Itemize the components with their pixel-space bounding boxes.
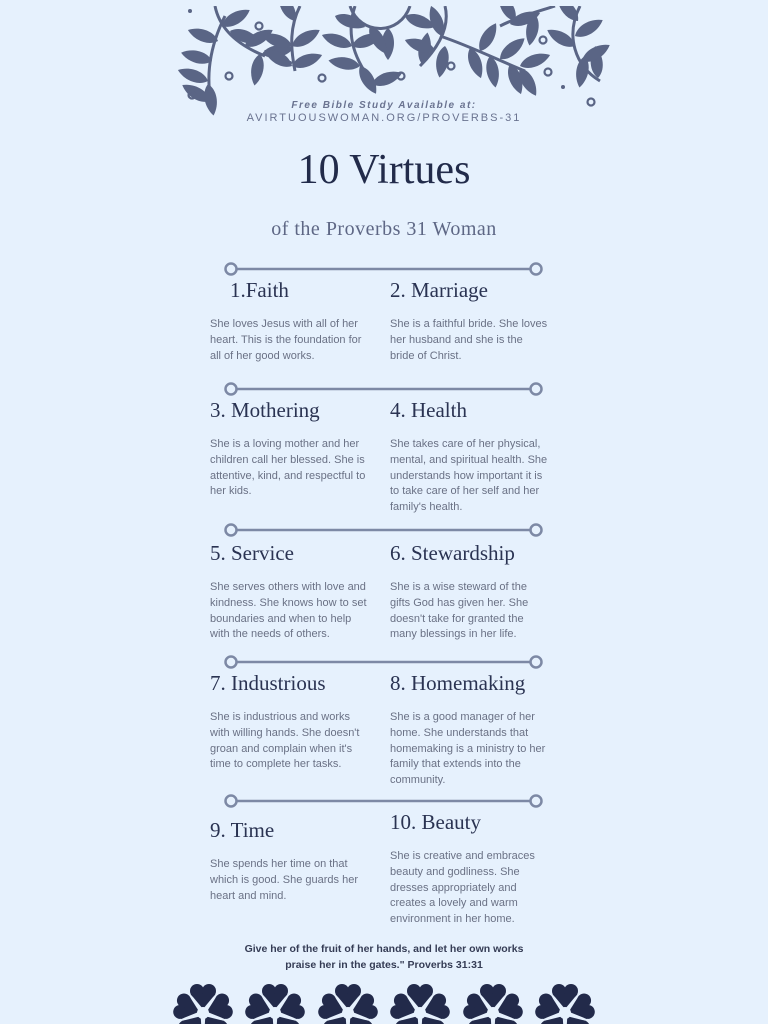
virtue 6: 6. Stewardship — [390, 541, 515, 565]
virtue 1: She loves Jesus with all of her heart. This is the foundation for all of her good works. — [210, 318, 361, 362]
virtue 8 — [390, 671, 546, 786]
virtue 5: She serves others with love and kindness. She knows how to set boundaries and when to help with the needs of others. — [210, 581, 367, 640]
quote — [245, 943, 523, 971]
decoration: top leaves — [178, 6, 610, 116]
virtue 10 — [390, 810, 535, 925]
virtue 5: 5. Service — [210, 541, 294, 565]
virtue 4: 4. Health — [390, 398, 467, 422]
virtue 4: She takes care of her physical, mental, and spiritual health. She understands how important it is to take care of her self and her family's health. — [390, 438, 547, 513]
virtue 5 — [210, 541, 367, 640]
subtitle: of the Proverbs 31 Woman — [271, 218, 497, 240]
virtue 9 — [210, 818, 358, 902]
decoration: bottom flowers — [173, 984, 595, 1024]
virtue 8: She is a good manager of her home. She understands that homemaking is a ministry to her family that extends into the community. — [390, 711, 545, 786]
virtue 10: She is creative and embraces beauty and godliness. She dresses appropriately and creates a lovely and warm environment in her home. — [390, 850, 535, 925]
virtue 6: She is a wise steward of the gifts God has given her. She doesn't take for granted the many blessings in her life. — [390, 581, 528, 640]
virtue 2: She is a faithful bride. She loves her husband and she is the bride of Christ. — [390, 318, 547, 362]
text: bible study link: AVIRTUOUSWOMAN.ORG/PROVERBS-31 — [247, 112, 521, 124]
virtue 3: She is a loving mother and her children call her blessed. She is attentive, kind, and respectful to her kids. — [210, 438, 365, 497]
virtue 1 — [210, 278, 362, 362]
text: bible study link — [246, 100, 521, 124]
text: bible study link: Free Bible Study Available at: — [291, 100, 477, 111]
virtue 9: 9. Time — [210, 818, 274, 842]
quote: praise her in the gates." Proverbs 31:31 — [285, 959, 483, 971]
virtue 2 — [390, 278, 547, 362]
quote: Give her of the fruit of her hands, and let her own works — [245, 943, 523, 955]
virtue 6 — [390, 541, 528, 640]
title: 10 Virtues — [298, 147, 470, 193]
virtue 7: 7. Industrious — [210, 671, 326, 695]
virtue 3: 3. Mothering — [210, 398, 320, 422]
virtue 9: She spends her time on that which is good. She guards her heart and mind. — [210, 858, 358, 902]
virtue 7: She is industrious and works with willing hands. She doesn't groan and complain when it's time to complete her tasks. — [210, 711, 359, 770]
virtue 4 — [390, 398, 547, 513]
virtue 2: 2. Marriage — [390, 278, 488, 302]
virtue 3 — [210, 398, 365, 497]
virtue 7 — [210, 671, 360, 770]
virtue 1: 1.Faith — [230, 278, 289, 302]
virtue 10: 10. Beauty — [390, 810, 481, 834]
virtue 8: 8. Homemaking — [390, 671, 525, 695]
